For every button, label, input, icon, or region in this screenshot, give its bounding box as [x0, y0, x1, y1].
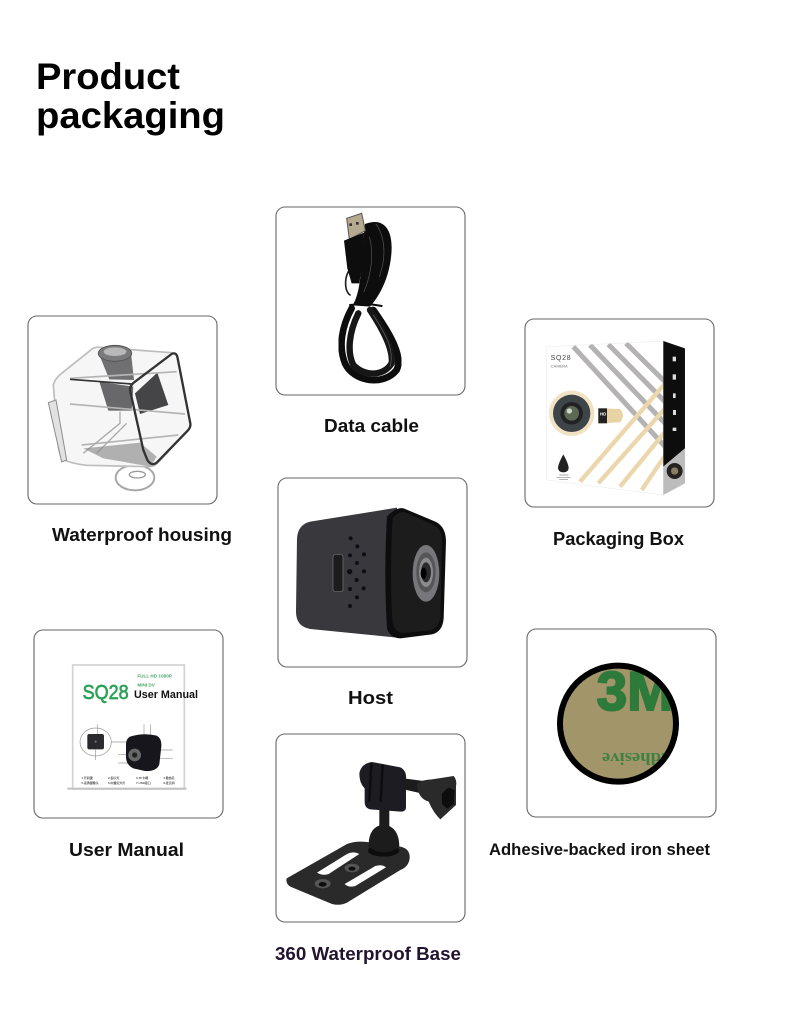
panel: waterproof housing: [28, 316, 217, 504]
icon: mini camera: [296, 508, 446, 638]
icon: adhesive disc: [560, 660, 676, 782]
label: user manual: User Manual: [69, 840, 184, 860]
icon: transparent waterproof case: [48, 345, 190, 490]
icon: manual cover: 7.USB接口: [136, 780, 151, 785]
icon: manual cover: 8.麦克风: [163, 780, 175, 785]
panel: host camera: [278, 478, 467, 667]
icon: tripod mount: [286, 762, 456, 905]
icon: adhesive disc: 3M: [597, 660, 673, 722]
label: host: Host: [348, 688, 393, 708]
label: waterproof base: 360 Waterproof Base: [275, 944, 461, 964]
icon: adhesive disc: adhesive: [602, 749, 670, 768]
panel: adhesive sheet: [527, 629, 716, 817]
label: packaging box: Packaging Box: [553, 529, 684, 549]
title: packaging: [36, 95, 225, 136]
panel: data cable: [276, 207, 465, 395]
title: Product: [36, 56, 180, 97]
text: manual overlay caption: User Manual: [134, 689, 198, 701]
icon: manual cover: [67, 665, 187, 790]
icon: manual cover: MINI DV: [137, 683, 156, 688]
title: [36, 56, 225, 136]
text: box model name: SQ28: [551, 355, 571, 362]
icon: retail box: HD: [600, 412, 606, 417]
icon: manual cover: FULL HD 1080P: [137, 674, 172, 679]
icon: manual cover: 1.开机键: [81, 775, 93, 780]
panel: user manual: [34, 630, 223, 818]
label: data cable: Data cable: [324, 416, 419, 436]
label: adhesive sheet: Adhesive-backed iron sheet: [489, 840, 710, 859]
icon: retail box: [547, 341, 685, 495]
icon: manual cover: SQ28: [83, 681, 129, 704]
icon: manual cover: 2.指示灯: [108, 775, 119, 780]
icon: manual cover: 6.内置红外灯: [108, 780, 125, 785]
icon: manual cover: 3.TF卡槽: [136, 775, 148, 780]
icon: manual cover: 5.高清摄像头: [81, 780, 99, 785]
icon: retail box: CAMERA: [551, 363, 568, 368]
label: waterproof housing: Waterproof housing: [52, 525, 232, 545]
icon: manual cover: 4.散热孔: [163, 775, 175, 780]
panel: waterproof base: [276, 734, 465, 922]
panel: packaging box: [525, 319, 714, 507]
icon: USB cable: [342, 213, 398, 380]
